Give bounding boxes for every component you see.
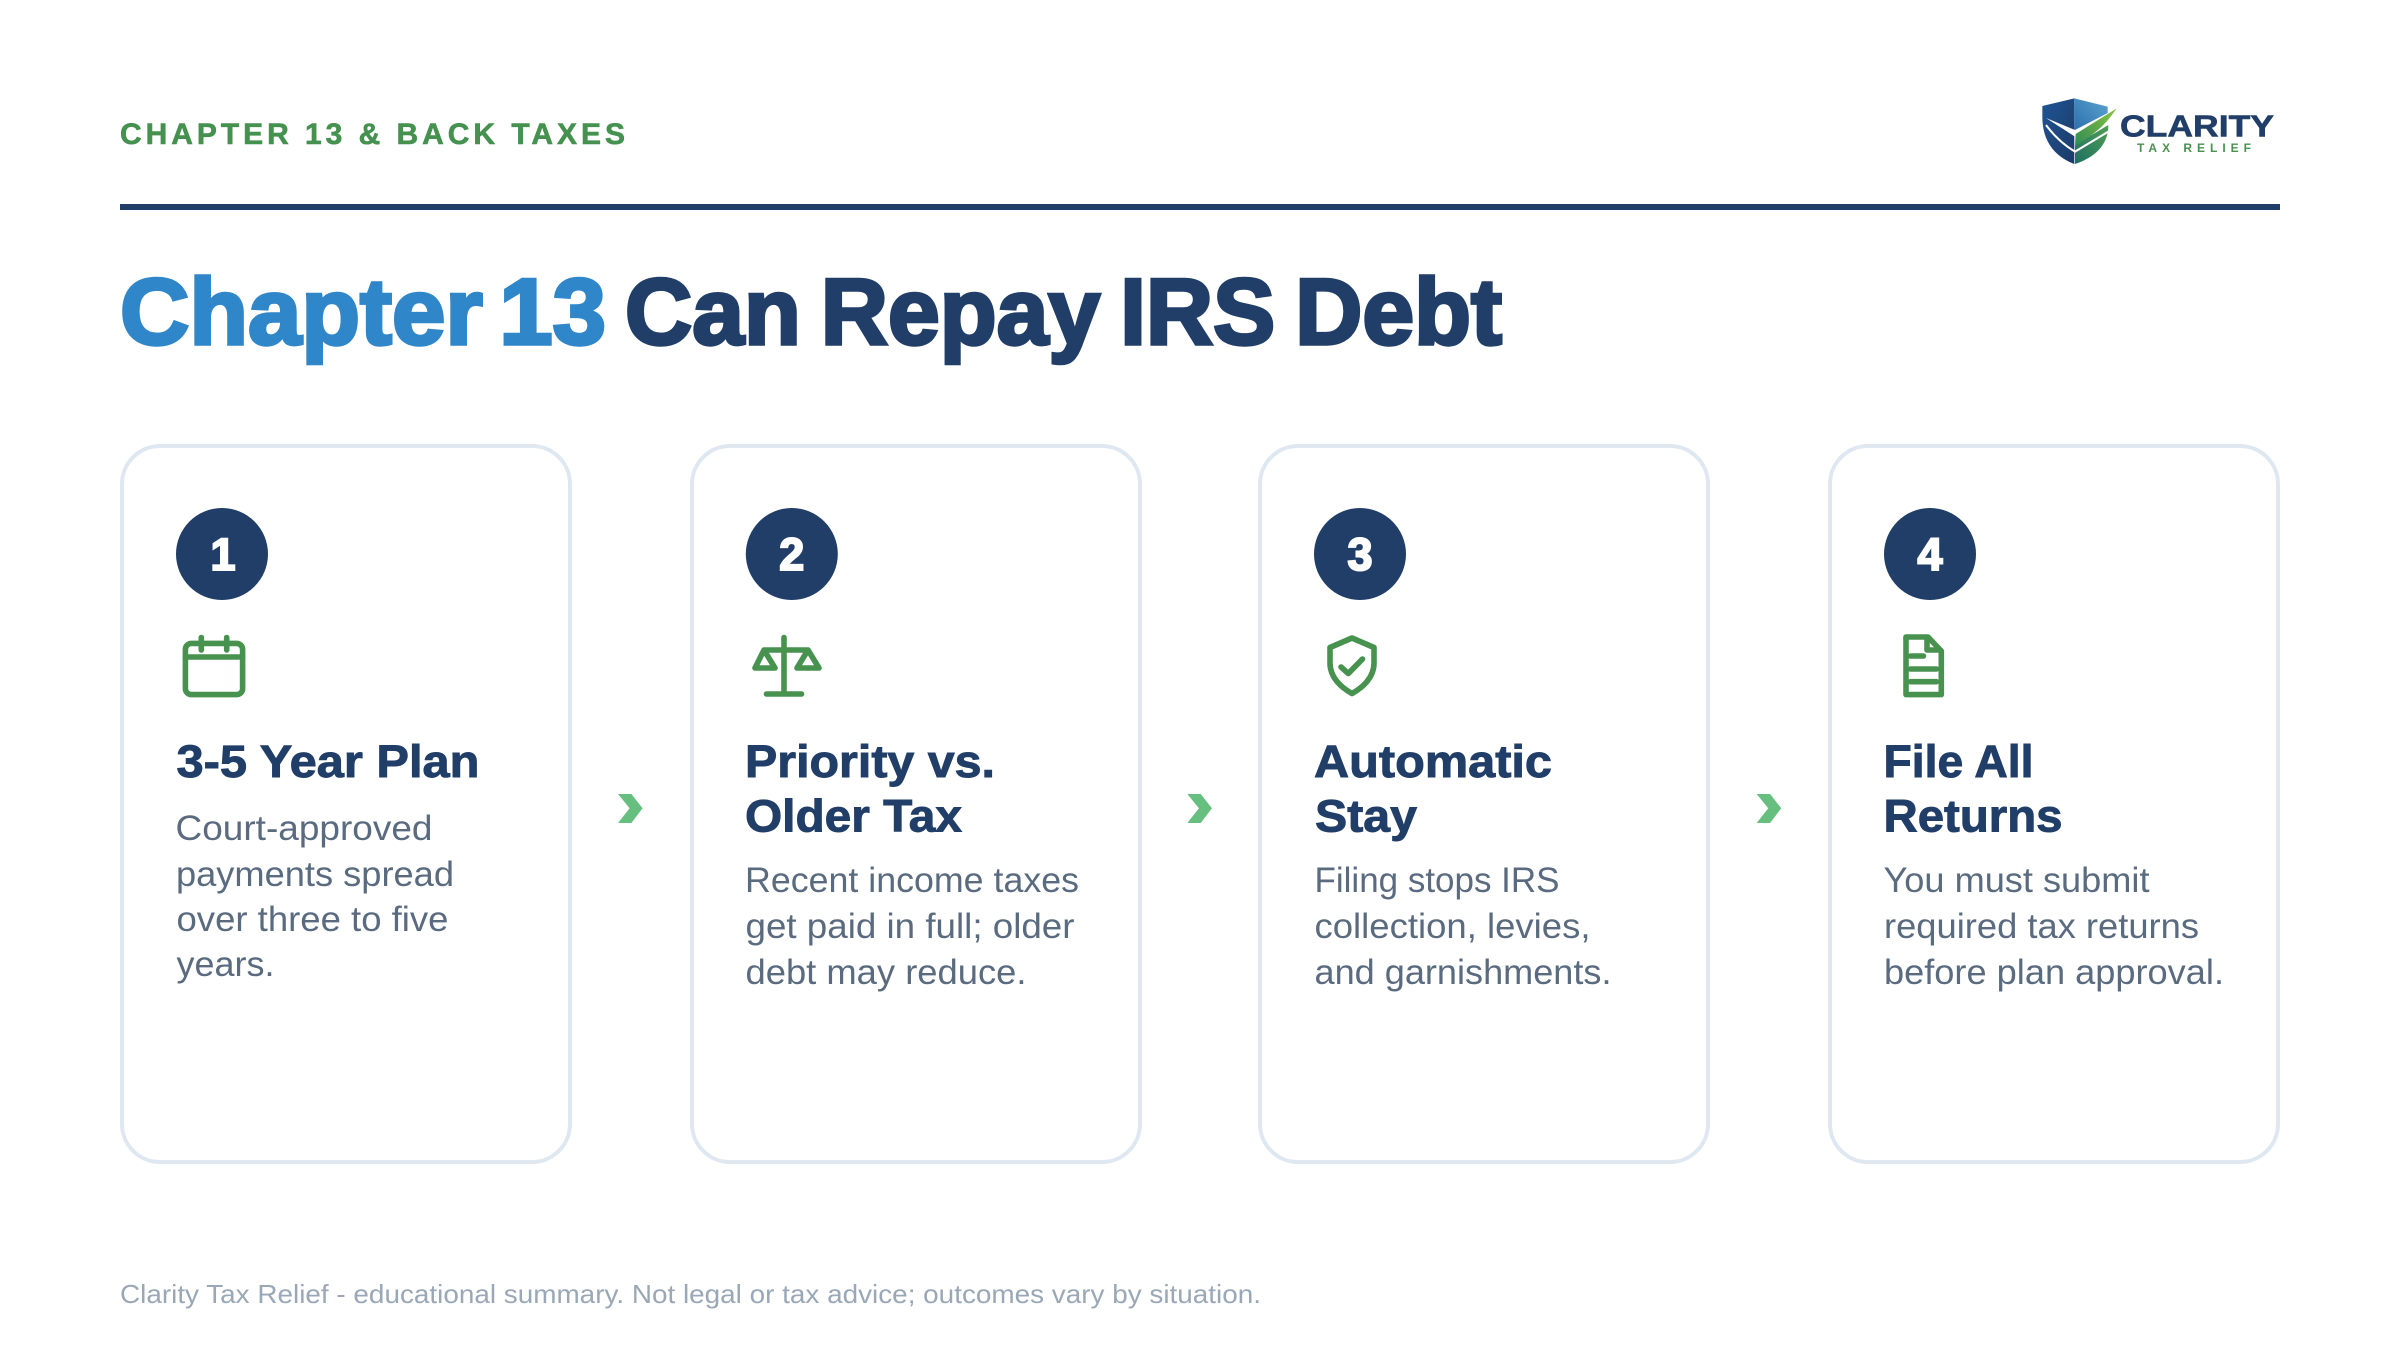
number badge 2 bbox=[746, 508, 838, 600]
step 1 heading: 3-5 Year Plan bbox=[176, 736, 480, 787]
number badge 2: 2 bbox=[779, 529, 804, 580]
icon: shield check bbox=[1330, 638, 1374, 694]
step 3 description: and garnishments. bbox=[1314, 953, 1612, 992]
step 3 heading: Stay bbox=[1315, 790, 1417, 842]
panel: step 3 bbox=[1260, 446, 1708, 1162]
step 4 description bbox=[1884, 861, 2224, 992]
step 1 description: payments spread bbox=[176, 855, 454, 894]
number badge 1: 1 bbox=[210, 529, 236, 580]
title: blue part: Chapter 13 bbox=[120, 259, 606, 364]
step 2 description: debt may reduce. bbox=[746, 953, 1026, 992]
number badge 3: 3 bbox=[1347, 529, 1373, 580]
panel: step 4 bbox=[1830, 446, 2278, 1162]
logo tagline: TAX RELIEF bbox=[2137, 141, 2251, 155]
number badge 4: 4 bbox=[1917, 529, 1943, 580]
number badge 1 bbox=[176, 508, 268, 600]
number badge 4 bbox=[1884, 508, 1976, 600]
step 1 description bbox=[176, 809, 454, 984]
step 4 heading: File All bbox=[1884, 736, 2034, 787]
title: navy part: Can Repay IRS Debt bbox=[625, 259, 1502, 364]
step 2 heading bbox=[745, 736, 995, 842]
step 2 description bbox=[745, 861, 1079, 992]
step 4 description: required tax returns bbox=[1884, 907, 2199, 946]
step 3 description: collection, levies, bbox=[1314, 907, 1590, 946]
number badge 3 bbox=[1314, 508, 1406, 600]
arrow 3 bbox=[1757, 794, 1781, 823]
arrow 2 bbox=[1187, 794, 1212, 823]
step 3 heading: Automatic bbox=[1314, 736, 1552, 787]
footer disclaimer: Clarity Tax Relief - educational summary. Not legal or tax advice; outcomes vary by situation. bbox=[120, 1279, 1261, 1309]
step 1 description: over three to five bbox=[176, 900, 448, 939]
step 4 description: You must submit bbox=[1884, 861, 2150, 900]
step 1 description: Court-approved bbox=[176, 809, 432, 848]
panel: step 2 bbox=[692, 446, 1140, 1162]
step 4 heading bbox=[1884, 736, 2062, 842]
step 4 heading: Returns bbox=[1884, 790, 2062, 842]
eyebrow heading: CHAPTER 13 & BACK TAXES bbox=[120, 118, 625, 151]
logo wordmark: CLARITY bbox=[2120, 110, 2274, 144]
step 1 description: years. bbox=[176, 945, 274, 984]
icon: document bbox=[1906, 637, 1941, 695]
title bbox=[120, 259, 1502, 364]
step 4 description: before plan approval. bbox=[1884, 953, 2224, 992]
step 2 description: get paid in full; older bbox=[746, 907, 1075, 946]
arrow 1 bbox=[618, 794, 643, 823]
panel: step 1 bbox=[122, 446, 570, 1162]
icon: scales bbox=[755, 638, 819, 694]
step 2 heading: Priority vs. bbox=[745, 736, 995, 787]
logo: Clarity Tax Relief bbox=[2042, 98, 2274, 164]
step 2 heading: Older Tax bbox=[745, 790, 962, 842]
step 3 description: Filing stops IRS bbox=[1314, 861, 1560, 900]
header rule bbox=[120, 204, 2280, 210]
step 2 description: Recent income taxes bbox=[745, 861, 1079, 900]
icon: logo shield bbox=[2042, 98, 2117, 164]
step 3 heading bbox=[1314, 736, 1552, 842]
icon: calendar bbox=[185, 638, 243, 695]
step 3 description bbox=[1314, 861, 1612, 992]
